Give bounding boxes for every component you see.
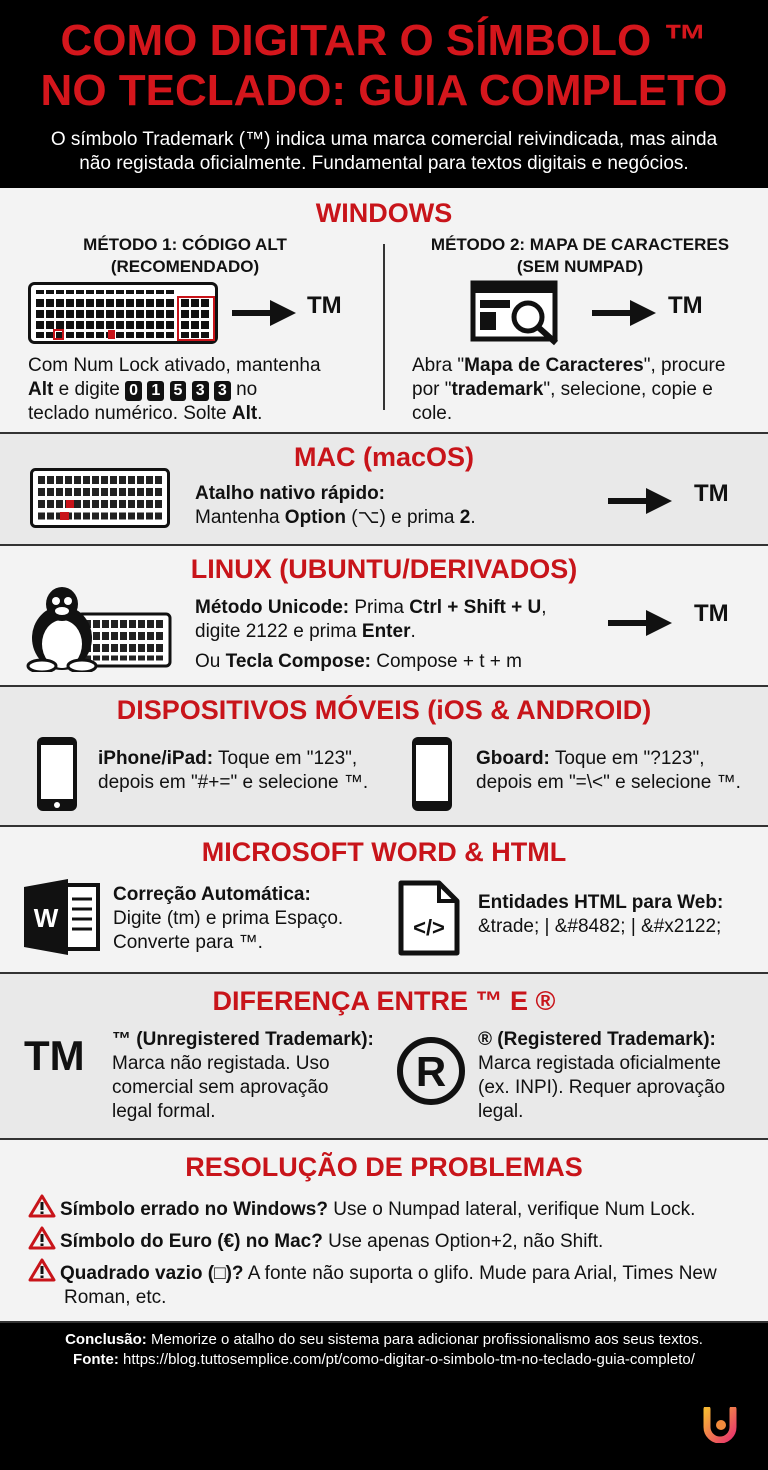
panel: windows [0,188,768,434]
icon: android phone [412,737,452,811]
icon: keyboard with numpad [28,282,218,344]
tm text: comercial sem aprovação [112,1077,328,1098]
iphone text [98,748,368,793]
icon: tux and keyboard [26,587,172,672]
panel: linux [0,546,768,687]
heading windows: WINDOWS [316,198,452,228]
TM: TM [668,292,703,319]
method 1 text: teclado numérico. Solte Alt. [28,403,262,424]
icon: registered [397,1037,465,1105]
r text: legal. [478,1101,523,1122]
mac text: Mantenha Option (⌥) e prima 2. [195,507,476,528]
icon: logo [704,1407,736,1443]
panel: difference [0,974,768,1140]
footer [65,1331,703,1368]
icon: word: W [34,903,59,933]
android text: Gboard: Toque em "?123", [476,748,705,769]
iphone text: depois em "#+=" e selecione ™. [98,772,368,793]
method 1 text: 0 [129,382,138,399]
icon: TM big: TM [24,1032,85,1079]
method 1 title: MÉTODO 1: CÓDIGO ALT [83,235,287,254]
icon: registered: R [416,1048,446,1095]
method 2 title [431,235,729,276]
word text: Digite (tm) e prima Espaço. [113,908,343,929]
heading mac: MAC (macOS) [294,442,474,472]
r text [478,1029,725,1122]
item 3 [28,1258,717,1308]
title: NO TECLADO: GUIA COMPLETO [41,66,727,115]
r text: ® (Registered Trademark): [478,1029,716,1050]
r text: (ex. INPI). Requer aprovação [478,1077,725,1098]
icon: html file [398,880,460,956]
html text: Entidades HTML para Web: [478,892,723,913]
word text: Converte para ™. [113,932,263,953]
method 2 title: MÉTODO 2: MAPA DE CARACTERES [431,235,729,254]
mac text: Atalho nativo rápido: [195,483,385,504]
method 1 text: 3 [218,382,227,399]
subtitle [51,129,718,174]
method 1 text: Alt e digite no [28,379,257,400]
panel: mac [0,434,768,546]
heading linux: LINUX (UBUNTU/DERIVADOS) [191,554,577,584]
title: COMO DIGITAR O SÍMBOLO ™ [61,16,707,65]
mac text [195,483,476,528]
heading word: MICROSOFT WORD & HTML [202,837,566,867]
html text [478,892,723,937]
arrow [232,300,296,326]
icon: word [24,879,100,955]
method 2 text: cole. [412,403,452,424]
panel: mobile [0,687,768,827]
header [0,0,768,188]
word text [113,884,343,953]
linux text [195,597,547,642]
panel: troubleshooting [0,1140,768,1323]
item 1: Símbolo errado no Windows? Use o Numpad lateral, verifique Num Lock. [60,1199,695,1220]
r text: Marca registada oficialmente [478,1053,721,1074]
method 1 title: (RECOMENDADO) [111,257,259,276]
method 2 text [412,355,725,424]
TM: TM [694,600,729,627]
method 1 text: 5 [174,382,182,399]
method 1 title [83,235,287,276]
method 1 text: Com Num Lock ativado, mantenha [28,355,321,376]
icon: mac keyboard [30,468,170,528]
android text [476,748,741,793]
item 3: Roman, etc. [64,1287,166,1308]
android text: depois em "=\<" e selecione ™. [476,772,741,793]
footer: Conclusão: Memorize o atalho do seu sistema para adicionar profissionalismo aos seus textos. [65,1331,703,1348]
method 2 title: (SEM NUMPAD) [517,257,643,276]
method 2 text: por "trademark", selecione, copie e [412,379,713,400]
heading troubleshooting: RESOLUÇÃO DE PROBLEMAS [185,1152,583,1182]
linux text: Método Unicode: Prima Ctrl + Shift + U, [195,597,547,618]
arrow [608,610,672,636]
icon: html file: </> [413,915,445,940]
iphone text: iPhone/iPad: Toque em "123", [98,748,357,769]
method 1 text [28,355,321,424]
item 3: Quadrado vazio (□)? A fonte não suporta o glifo. Mude para Arial, Times New [60,1263,717,1284]
linux compose text: Ou Tecla Compose: Compose + t + m [195,651,522,672]
tm text: Marca não registada. Uso [112,1053,330,1074]
title [41,16,727,115]
subtitle: O símbolo Trademark (™) indica uma marca comercial reivindicada, mas ainda [51,129,717,150]
heading mobile: DISPOSITIVOS MÓVEIS (iOS & ANDROID) [117,695,651,725]
panel: word html [0,827,768,974]
icon: iphone [37,737,77,811]
item 2: Símbolo do Euro (€) no Mac? Use apenas Option+2, não Shift. [60,1231,603,1252]
TM: TM [307,292,342,319]
tm text: legal formal. [112,1101,216,1122]
html text: &trade; | &#8482; | &#x2122; [478,916,721,937]
tm text: ™ (Unregistered Trademark): [112,1029,374,1050]
method 1 text: 1 [151,382,160,399]
arrow [592,300,656,326]
word text: Correção Automática: [113,884,311,905]
tm text [112,1029,374,1122]
TM: TM [694,480,729,507]
arrow [608,488,672,514]
subtitle: não registada oficialmente. Fundamental para textos digitais e negócios. [79,153,689,174]
icon: character map magnifier [470,280,558,346]
heading difference: DIFERENÇA ENTRE ™ E ® [213,986,555,1016]
footer: Fonte: https://blog.tuttosemplice.com/pt/como-digitar-o-simbolo-tm-no-teclado-guia-completo/ [73,1351,695,1368]
linux text: digite 2122 e prima Enter. [195,621,416,642]
method 1 text: 3 [196,382,205,399]
method 2 text: Abra "Mapa de Caracteres", procure [412,355,725,376]
